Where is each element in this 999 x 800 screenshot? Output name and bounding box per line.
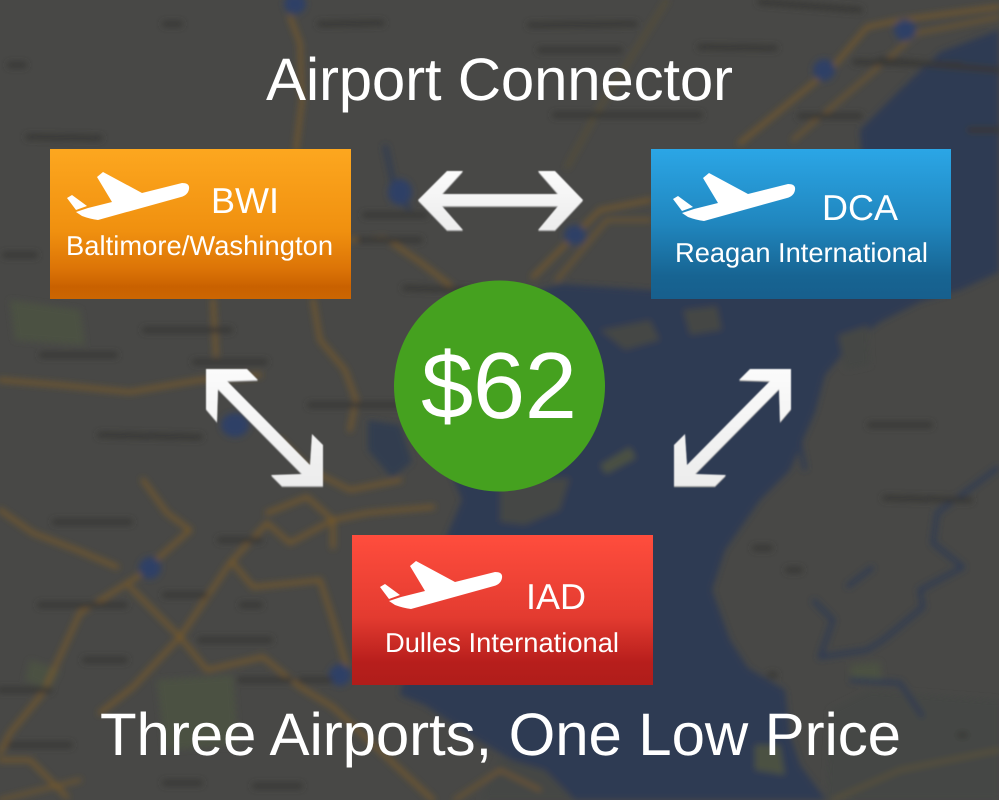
airport code IAD: IAD [526,576,586,617]
arrow: DCA to IAD [674,369,791,487]
price: $62 [421,333,577,438]
airport name IAD: Dulles International [385,627,619,658]
arrow: BWI to DCA [418,171,583,231]
icon: plane DCA [673,173,795,221]
highway shields [139,0,916,686]
icon: plane IAD [380,561,502,609]
airport code BWI: BWI [211,180,279,221]
price badge [394,280,605,492]
rivers [385,145,999,717]
green patches [10,300,882,775]
airport name BWI: Baltimore/Washington [66,230,333,261]
icon: plane BWI [67,172,189,220]
airport name DCA: Reagan International [675,237,928,268]
water: bay [400,30,999,800]
tagline: Three Airports, One Low Price [100,701,901,768]
panel: IAD [352,535,653,685]
panel: BWI [50,149,351,299]
land: islands and peninsulas [480,306,999,800]
panel: DCA [651,149,951,299]
title: Airport Connector [266,46,733,113]
water: small inlets [368,420,412,478]
arrow: BWI to IAD [206,369,323,487]
airport code DCA: DCA [822,187,898,228]
